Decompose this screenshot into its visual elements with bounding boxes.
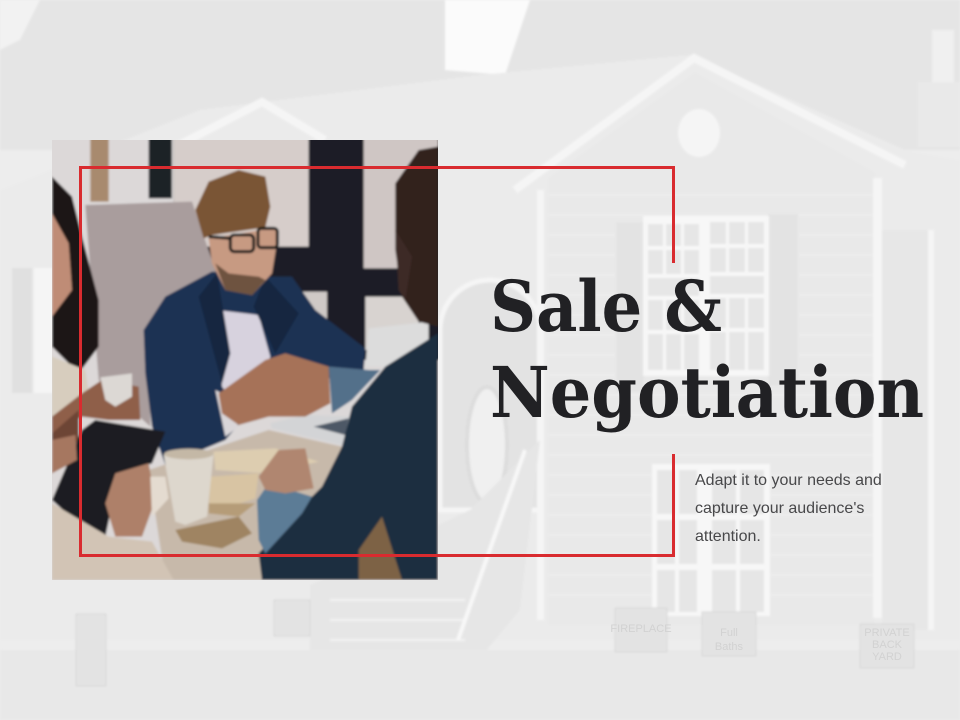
description text: capture your audience's	[695, 500, 864, 517]
background: faded house photograph: PRIVATE	[864, 627, 910, 639]
title: Negotiation	[490, 351, 924, 434]
title: Sale &	[490, 265, 722, 348]
background: faded house photograph: FIREPLACE	[610, 623, 672, 635]
paper cup	[164, 453, 214, 525]
handshake	[215, 390, 239, 437]
photo: business handshake at a meeting table	[52, 140, 438, 580]
background: faded house photograph: Full	[720, 627, 738, 639]
woman at left	[52, 177, 99, 373]
background: faded house photograph: Baths	[715, 641, 744, 653]
background: faded house photograph: BACK	[872, 639, 903, 651]
armchair	[85, 202, 219, 427]
man from behind	[395, 147, 438, 327]
laptop	[365, 322, 429, 367]
description text: Adapt it to your needs and	[695, 472, 882, 489]
notebooks	[214, 448, 319, 473]
description text	[695, 472, 882, 545]
table	[149, 430, 362, 580]
man in blue jacket	[144, 272, 365, 465]
tablet and hand	[52, 420, 165, 537]
background: faded house photograph: YARD	[872, 651, 902, 663]
description text: attention.	[695, 528, 761, 545]
window frames	[90, 133, 109, 202]
